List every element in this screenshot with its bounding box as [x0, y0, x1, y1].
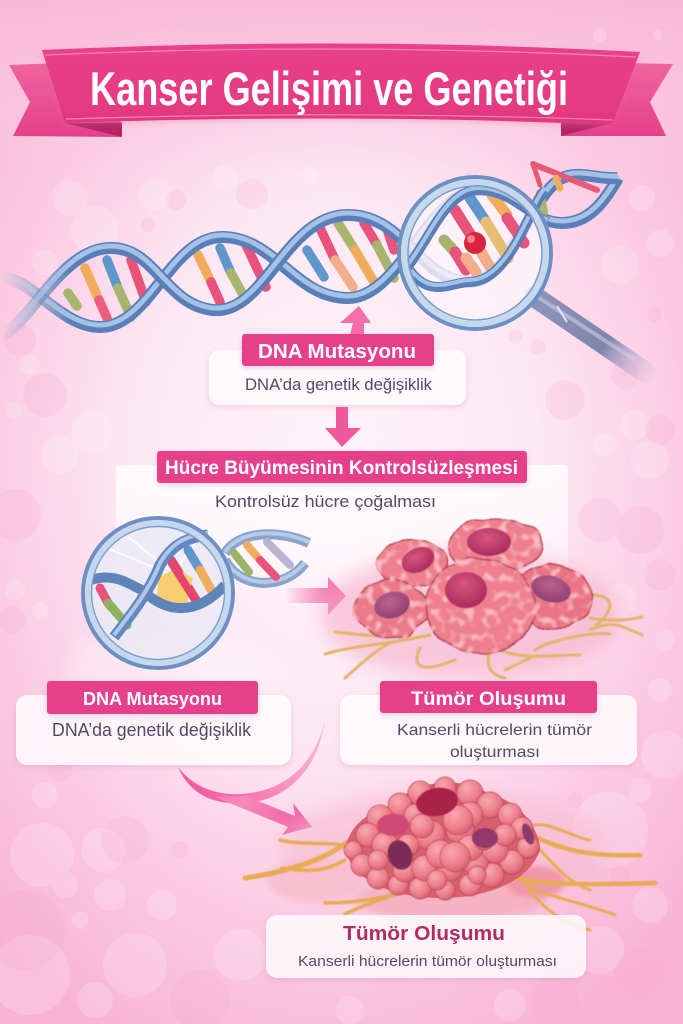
lens ring — [399, 177, 551, 329]
label — [47, 681, 258, 714]
tail rungs — [234, 542, 290, 577]
DNA strand back — [0, 178, 618, 327]
tumor vessels — [245, 825, 655, 930]
label text: DNA Mutasyonu — [83, 689, 222, 709]
magnifier handle — [533, 294, 645, 372]
tissue halo — [320, 550, 620, 680]
right ribbon fold — [561, 123, 612, 136]
label text: DNA Mutasyonu — [258, 341, 416, 363]
tumor dark spots — [377, 785, 536, 873]
panel: tumor formation: oluşturması — [450, 744, 540, 761]
label — [380, 681, 597, 713]
description: Kontrolsüz hücre çoğalması — [215, 492, 436, 511]
tissue halo — [280, 790, 610, 910]
tumor vessels — [325, 595, 642, 678]
panel: uncontrolled growth — [116, 451, 568, 600]
label — [157, 451, 527, 483]
card — [266, 915, 586, 978]
panel: DNA mutation top — [209, 334, 466, 405]
description: Kanserli hücrelerin tümör oluşturması — [298, 953, 557, 970]
panel: tumor formation bottom — [266, 915, 586, 978]
main DNA helix — [0, 164, 618, 338]
tumor nodules — [344, 777, 539, 900]
description: Kanserli hücrelerin tümör — [397, 722, 593, 739]
arc — [178, 720, 325, 803]
label text: Hücre Büyümesinin Kontrolsüzleşmesi — [165, 458, 518, 479]
tumor nuclei — [371, 528, 574, 622]
lower tissue — [267, 858, 565, 920]
arrow shaft and head — [215, 796, 312, 835]
description: DNA’da genetik değişiklik — [52, 720, 252, 740]
card — [209, 350, 466, 405]
label text: Tümör Oluşumu — [411, 689, 566, 710]
heading: Tümör Oluşumu — [343, 923, 505, 945]
DNA strand front — [0, 175, 618, 338]
lens rungs — [100, 550, 213, 625]
large tumor — [245, 777, 655, 930]
arrow down — [325, 407, 361, 447]
main ribbon — [42, 43, 640, 125]
label — [242, 334, 434, 366]
arrow right — [285, 577, 346, 615]
arrow up — [340, 306, 371, 335]
magnifying glass lens — [399, 177, 551, 329]
mutation burst — [157, 568, 193, 610]
tail helix — [225, 534, 309, 583]
DNA rungs — [68, 223, 394, 318]
card — [340, 695, 637, 765]
left ribbon fold — [65, 123, 122, 137]
left ribbon tail — [9, 63, 122, 137]
panel: tumor formation — [340, 681, 637, 765]
lens close-up rungs — [444, 195, 524, 272]
panel: DNA mutation lower — [16, 681, 291, 765]
top right DNA rungs — [533, 164, 597, 212]
right ribbon tail — [561, 63, 673, 136]
mutation spot — [464, 232, 486, 254]
description: DNA’da genetik değişiklik — [245, 375, 432, 394]
tumor base — [345, 783, 540, 898]
curved arrow — [178, 720, 325, 835]
title banner — [9, 43, 673, 137]
card — [116, 465, 568, 600]
lens fill — [82, 517, 234, 669]
lens ring — [83, 518, 233, 668]
tumor cluster — [320, 519, 642, 680]
card — [16, 695, 291, 765]
tumor lobes — [355, 519, 591, 653]
lower DNA magnifier — [60, 517, 309, 690]
helix strands in lens — [91, 577, 225, 608]
